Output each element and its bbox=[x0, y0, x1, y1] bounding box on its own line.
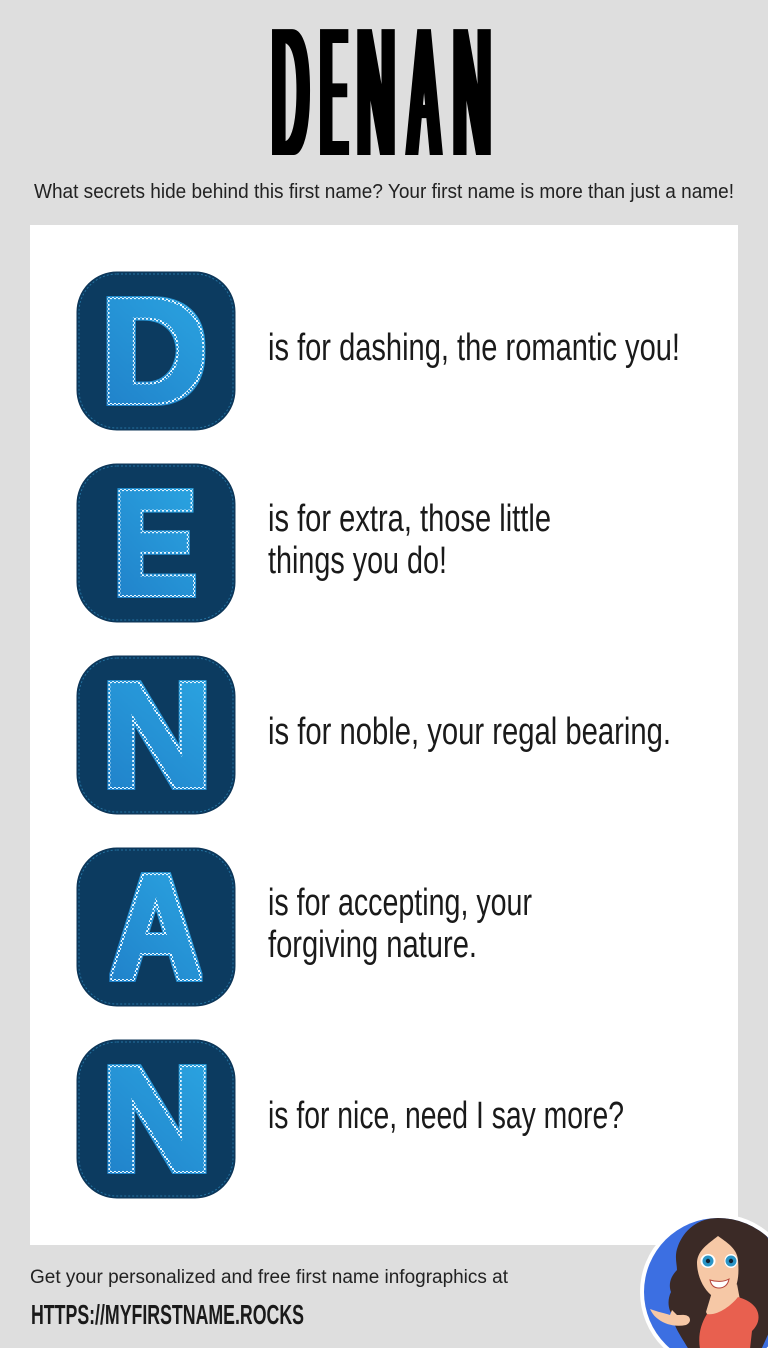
row: A bbox=[77, 845, 532, 1010]
panel: letters bbox=[30, 225, 738, 1245]
icon: letter E: E bbox=[113, 461, 197, 626]
icon: letter N second: N bbox=[101, 1037, 213, 1202]
footer url: HTTPS://MYFIRSTNAME.ROCKS bbox=[31, 1299, 304, 1330]
icon: letter N: N bbox=[101, 653, 213, 818]
row: N bbox=[77, 653, 671, 818]
icon: letter D bbox=[77, 269, 235, 434]
text: E lines bbox=[268, 498, 551, 582]
text: E lines: things you do! bbox=[268, 540, 447, 582]
row: N second bbox=[77, 1037, 624, 1202]
icon: letter A bbox=[77, 845, 235, 1010]
text: N second line: is for nice, need I say more? bbox=[268, 1095, 624, 1137]
text: A lines: forgiving nature. bbox=[268, 924, 477, 966]
icon: letter E bbox=[77, 461, 235, 626]
subtitle: What secrets hide behind this first name? Your first name is more than just a name! bbox=[34, 181, 734, 203]
icon: letter D: D bbox=[101, 269, 208, 434]
title bbox=[272, 0, 490, 195]
text: A lines: is for accepting, your bbox=[268, 882, 532, 924]
icon: letter N second bbox=[77, 1037, 235, 1202]
row: D bbox=[77, 269, 680, 434]
icon: avatar bbox=[640, 1216, 768, 1348]
row: E bbox=[77, 461, 551, 626]
footer text: Get your personalized and free first name infographics at bbox=[30, 1267, 509, 1288]
icon: letter A: A bbox=[110, 845, 202, 1010]
text: A lines bbox=[268, 882, 532, 966]
icon: letter N bbox=[77, 653, 235, 818]
text: E lines: is for extra, those little bbox=[268, 498, 551, 540]
